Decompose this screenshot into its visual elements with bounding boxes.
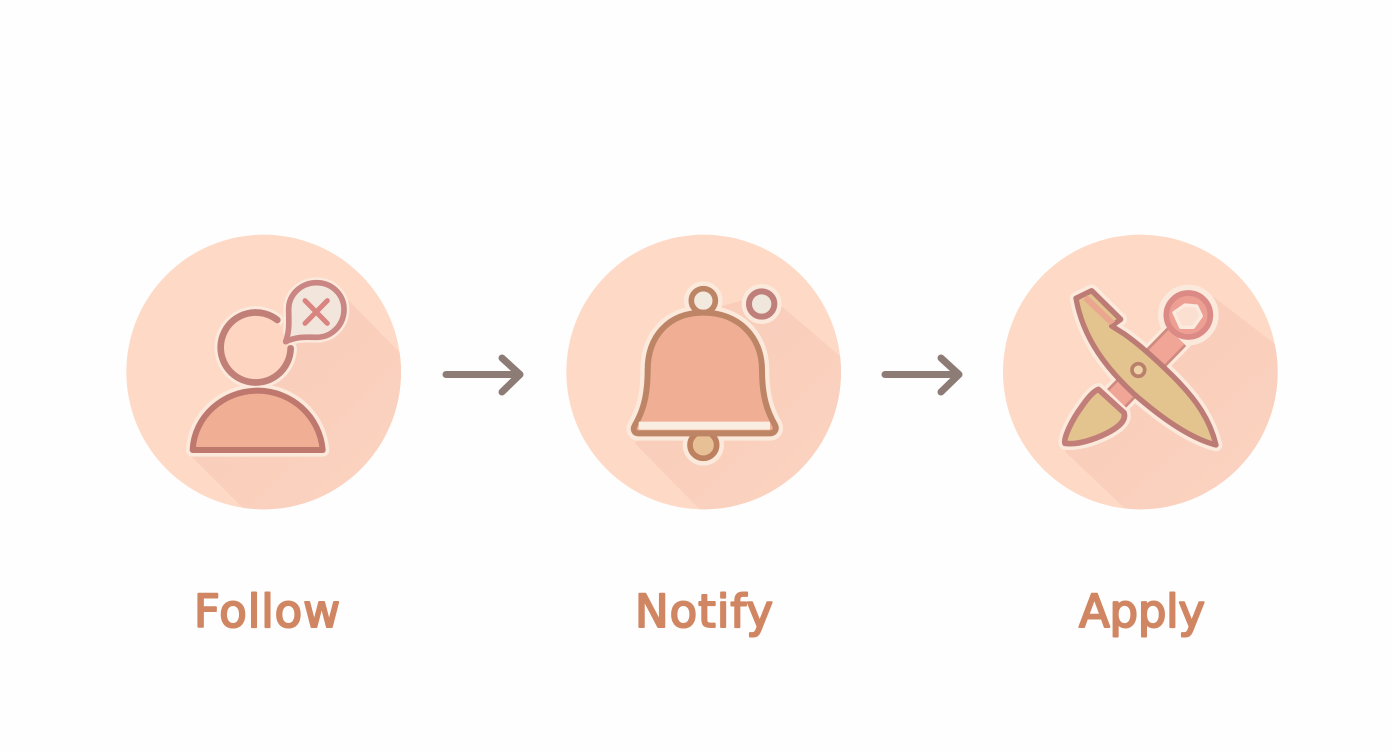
- x mark: [305, 301, 327, 323]
- scissors halo: [1065, 291, 1216, 445]
- arrow: follow to notify: [446, 358, 520, 392]
- bell halo: [634, 289, 776, 458]
- short blade: [1065, 389, 1124, 444]
- panel: follow: [126, 235, 420, 638]
- bell body: [634, 313, 776, 433]
- blade tip notch: [1083, 295, 1115, 325]
- head halo: [221, 312, 291, 382]
- panel: apply: [1003, 235, 1300, 638]
- body: [193, 391, 323, 450]
- notification dot: [749, 291, 774, 317]
- panel: notify: [566, 235, 860, 638]
- icon: notify circle: [566, 235, 860, 517]
- label: follow: Follow: [194, 585, 340, 638]
- bubble halo: [286, 283, 344, 342]
- arrow: notify to apply: [885, 358, 959, 392]
- bell rim: [639, 422, 770, 430]
- label: notify: Notify: [635, 585, 773, 638]
- handle: [1117, 337, 1177, 398]
- finger ring: [1166, 293, 1210, 337]
- long blade: [1076, 291, 1216, 445]
- pivot: [1132, 364, 1145, 376]
- body halo: [193, 391, 323, 450]
- speech bubble: [286, 283, 344, 342]
- head ring: [221, 312, 291, 382]
- clapper: [690, 432, 717, 458]
- ring hole: [1174, 305, 1201, 327]
- label: apply: Apply: [1079, 585, 1205, 638]
- top loop: [691, 289, 715, 313]
- icon: follow circle: [126, 235, 420, 518]
- icon: apply circle: [1003, 235, 1300, 512]
